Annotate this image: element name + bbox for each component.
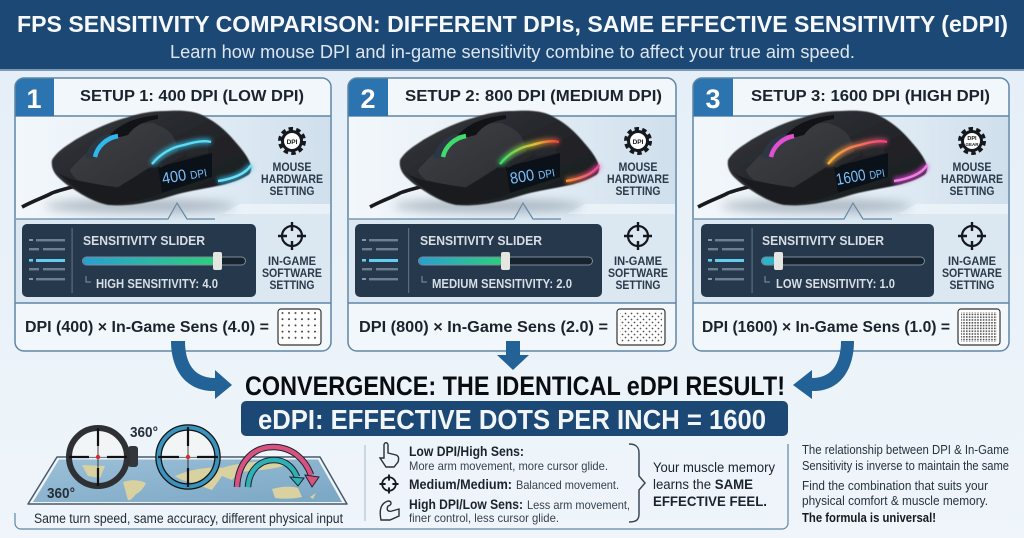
sensitivity slider panel: MEDIUM SENSITIVITY: 2.0: [432, 277, 572, 291]
illustration: map and scopes: 360°: [47, 486, 75, 502]
sensitivity slider panel: [22, 224, 256, 297]
muscle memory text: Your muscle memory: [653, 459, 775, 475]
muscle memory text: EFFECTIVE FEEL.: [653, 493, 767, 509]
hardware setting icon and label: HARDWARE: [607, 174, 669, 186]
number badge: [693, 78, 733, 116]
number badge: 2: [360, 84, 376, 114]
software setting icon and label: SETTING: [950, 280, 995, 292]
number badge: [348, 78, 388, 116]
scope 2: [158, 427, 218, 487]
mouse: 1600 DPI: [698, 111, 927, 213]
hardware setting icon and label: [941, 130, 1003, 198]
sensitivity slider panel: SENSITIVITY SLIDER: [420, 233, 543, 248]
hardware setting icon and label: DPI: [967, 136, 977, 142]
subtitle: Learn how mouse DPI and in-game sensitivity combine to affect your true aim speed.: [170, 42, 855, 62]
sensitivity slider panel: SENSITIVITY SLIDER: [83, 233, 206, 248]
icon: hand: [380, 443, 399, 467]
sensitivity slider panel: HIGH SENSITIVITY: 4.0: [96, 277, 218, 291]
rotation arcs: [237, 447, 319, 487]
mouse: 1600 DPI: 1600 DPI: [835, 164, 886, 189]
software setting icon and label: SETTING: [616, 280, 661, 292]
low dpi text: Low DPI/High Sens:: [409, 444, 524, 459]
panel: setup 3: [693, 78, 1009, 351]
dot grid: medium: [617, 309, 665, 345]
arrow: right curved: [793, 341, 854, 399]
high dpi text: finer control, less cursor glide.: [409, 511, 559, 525]
high dpi text: Less arm movement,: [527, 498, 630, 512]
panel heading: SETUP 1: 400 DPI (LOW DPI): [80, 88, 304, 105]
icon: crosshair: [379, 474, 399, 494]
side note: The formula is universal!: [802, 511, 936, 525]
eDPI result bar: eDPI: EFFECTIVE DOTS PER INCH = 1600: [258, 404, 766, 435]
hardware setting icon and label: [261, 130, 323, 198]
sensitivity slider panel: [701, 224, 934, 297]
software setting icon and label: SETTING: [270, 280, 315, 292]
software setting icon and label: SOFTWARE: [262, 268, 322, 280]
hardware setting icon and label: GEAR: [965, 142, 979, 147]
medium text: Balanced movement.: [516, 478, 619, 492]
number badge: [15, 78, 54, 116]
icon: arm: [380, 501, 399, 520]
hardware setting icon and label: MOUSE: [618, 162, 658, 174]
scope 1: [69, 428, 138, 486]
dot grid: dense: [958, 309, 1000, 345]
hardware setting icon and label: SETTING: [616, 186, 661, 198]
mouse: 400 DPI: [22, 111, 251, 213]
hardware setting icon and label: MOUSE: [272, 162, 312, 174]
software setting icon and label: IN-GAME: [268, 256, 316, 268]
map: [28, 457, 347, 504]
hardware setting icon and label: HARDWARE: [261, 174, 323, 186]
illustration: map and scopes: [28, 425, 347, 504]
high dpi text: [409, 497, 630, 525]
brace: [629, 444, 645, 522]
software setting icon and label: IN-GAME: [948, 256, 996, 268]
bottom frame lines: [15, 444, 788, 529]
sensitivity slider panel: SENSITIVITY SLIDER: [762, 233, 885, 248]
header banner: [0, 0, 1024, 71]
illustration caption: Same turn speed, same accuracy, different physical input: [34, 511, 343, 526]
panel heading: SETUP 3: 1600 DPI (HIGH DPI): [751, 88, 990, 105]
convergence heading: CONVERGENCE: THE IDENTICAL eDPI RESULT!: [245, 371, 785, 401]
muscle memory text: learns the SAME: [653, 476, 753, 492]
panel heading: SETUP 2: 800 DPI (MEDIUM DPI): [405, 88, 662, 105]
dot grid: sparse: [278, 309, 321, 345]
software setting icon and label: SOFTWARE: [608, 268, 668, 280]
software setting icon and label: [262, 222, 322, 292]
side note: physical comfort & muscle memory.: [802, 494, 988, 508]
low dpi text: More arm movement, more cursor glide.: [409, 459, 608, 473]
mouse: 800 DPI: [370, 111, 599, 213]
software setting icon and label: [942, 222, 1002, 292]
formula: DPI (1600) × In-Game Sens (1.0) =: [702, 319, 950, 336]
medium text: Medium/Medium:: [409, 477, 512, 492]
360 degree labels: 360°: [130, 425, 158, 441]
software setting icon and label: IN-GAME: [614, 256, 662, 268]
software setting icon and label: [608, 222, 668, 292]
title: FPS SENSITIVITY COMPARISON: DIFFERENT DPIs, SAME EFFECTIVE SENSITIVITY (eDPI): [17, 11, 1008, 37]
arrow: centre down: [497, 341, 529, 370]
hardware setting icon and label: [607, 130, 669, 198]
hardware setting icon and label: SETTING: [270, 186, 315, 198]
hardware setting icon and label: HARDWARE: [941, 174, 1003, 186]
formula: DPI (400) × In-Game Sens (4.0) =: [25, 319, 269, 336]
panel: setup 2: [348, 78, 676, 351]
muscle memory text: [653, 459, 775, 509]
number badge: 1: [26, 84, 42, 114]
panel: setup 1: [15, 78, 331, 351]
side note: Find the combination that suits your: [802, 479, 988, 493]
hardware setting icon and label: MOUSE: [952, 162, 992, 174]
low dpi text: [409, 444, 608, 473]
side note: The relationship between DPI & In-Game: [802, 443, 1009, 457]
software setting icon and label: SOFTWARE: [942, 268, 1002, 280]
sensitivity slider panel: LOW SENSITIVITY: 1.0: [776, 277, 895, 291]
hardware setting icon and label: SETTING: [950, 186, 995, 198]
medium text: [409, 477, 619, 492]
formula: DPI (800) × In-Game Sens (2.0) =: [359, 319, 608, 336]
hardware setting icon and label: DPI: [287, 139, 298, 146]
hardware setting icon and label: DPI: [633, 139, 644, 146]
number badge: 3: [705, 84, 721, 114]
mouse: 400 DPI: 400 DPI: [161, 163, 208, 188]
comparison list: [379, 443, 630, 525]
high dpi text: High DPI/Low Sens:: [409, 497, 523, 512]
mouse: 800 DPI: 800 DPI: [509, 163, 556, 188]
sensitivity slider panel: [355, 224, 602, 297]
side note: [802, 443, 1009, 525]
arrow: left curved: [171, 341, 232, 399]
